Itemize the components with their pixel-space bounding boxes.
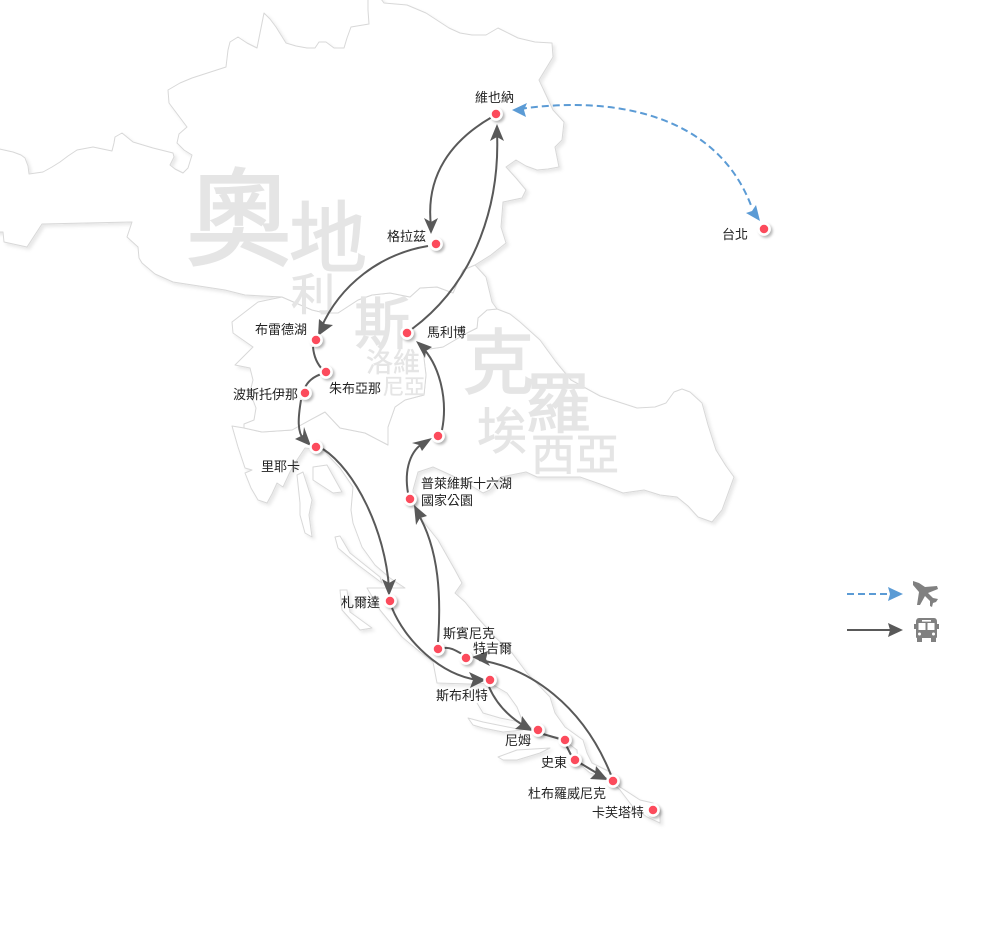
- country name: 斯洛維尼亞: [354, 293, 425, 399]
- route: Maribor to Vienna: [412, 132, 497, 329]
- island: Korcula: [498, 748, 550, 760]
- route: Dubrovnik to Trogir: [479, 660, 611, 775]
- route: Bled to Ljubljana: [313, 347, 323, 370]
- route: Nin to Ston: [543, 734, 571, 755]
- island: Pag: [335, 536, 382, 583]
- country name: 奧地利: 地: [289, 195, 367, 283]
- route: Sibenik to Plitvice: [417, 512, 439, 642]
- bus routes: [295, 117, 611, 780]
- location markers: [300, 108, 770, 816]
- route: Trogir to Sibenik: [444, 648, 462, 654]
- icon: bus: [914, 618, 939, 642]
- island: Krk: [313, 465, 342, 493]
- country name: 奧地利: 奧: [186, 162, 292, 280]
- city labels: 格拉茲: [387, 229, 426, 244]
- city labels: 布雷德湖: [255, 322, 307, 337]
- route: Zadar to Split: [392, 608, 478, 680]
- island: Brac: [477, 703, 520, 722]
- icon: airplane: [913, 581, 938, 607]
- city labels: 卡芙塔特: [592, 805, 644, 820]
- country name: 克羅埃西亞: 克: [463, 325, 534, 404]
- city labels: 台北: [722, 227, 748, 242]
- route: Rijeka to Zadar: [323, 449, 389, 588]
- country name: 奧地利: [186, 162, 367, 320]
- city labels: 杜布羅威尼克: [528, 786, 606, 801]
- arrowhead: Vienna end: [512, 103, 527, 117]
- flight route: Taipei to Vienna: [512, 103, 760, 221]
- city labels: 里耶卡: [261, 459, 300, 474]
- region: Slovenia outline: [232, 265, 497, 445]
- route: Graz to Bled: [321, 246, 428, 328]
- region: Austria outline: [0, 0, 564, 313]
- city labels: 尼姆: [505, 733, 531, 748]
- island: Dugi Otok: [340, 590, 372, 630]
- city labels: 斯賓尼克: [443, 626, 495, 641]
- city labels: 普萊維斯十六湖: [421, 476, 512, 491]
- city labels: 朱布亞那: [329, 381, 381, 396]
- country name: 克羅埃西亞: 西亞: [531, 431, 619, 480]
- country name: 斯洛維尼亞: 洛維: [366, 348, 420, 378]
- country name: 克羅埃西亞: 埃: [477, 404, 527, 460]
- island: Hvar: [468, 718, 523, 732]
- city labels: 特吉爾: [473, 641, 512, 656]
- island: Cres: [297, 472, 312, 537]
- city labels: 維也納: [475, 90, 514, 105]
- country name: 斯洛維尼亞: 斯: [354, 293, 410, 356]
- map: land outlines: [0, 0, 734, 823]
- country name: 斯洛維尼亞: 尼亞: [383, 376, 425, 399]
- legend: bus arrow: [847, 623, 903, 637]
- route: Ljubljana to Postojna: [305, 374, 322, 388]
- route: Vienna to Graz: [430, 117, 492, 226]
- country name: 克羅埃西亞: 羅: [525, 367, 591, 441]
- route: Rastoke to Maribor: [421, 346, 444, 430]
- route: Split to Nin: [489, 687, 526, 727]
- city labels: 斯布利特: [436, 688, 488, 703]
- city labels: 國家公園: [421, 493, 473, 508]
- region: Croatia outline: [232, 309, 734, 823]
- route: Postojna to Rijeka: [299, 400, 304, 440]
- city labels: 札爾達: [341, 595, 380, 610]
- route: Plitvice to Rastoke: [407, 442, 425, 493]
- legend: flight arrow: [847, 587, 903, 601]
- city labels: 波斯托伊那: [233, 387, 298, 402]
- country name: 克羅埃西亞: [463, 325, 619, 480]
- country name: 奧地利: 利: [291, 271, 335, 320]
- route: Ston to Dubrovnik: [580, 763, 600, 775]
- city labels: [233, 90, 748, 820]
- city labels: 史東: [541, 755, 567, 770]
- arrowhead: Taipei end: [746, 205, 760, 221]
- legend: [847, 581, 939, 642]
- city labels: 馬利博: [427, 325, 466, 340]
